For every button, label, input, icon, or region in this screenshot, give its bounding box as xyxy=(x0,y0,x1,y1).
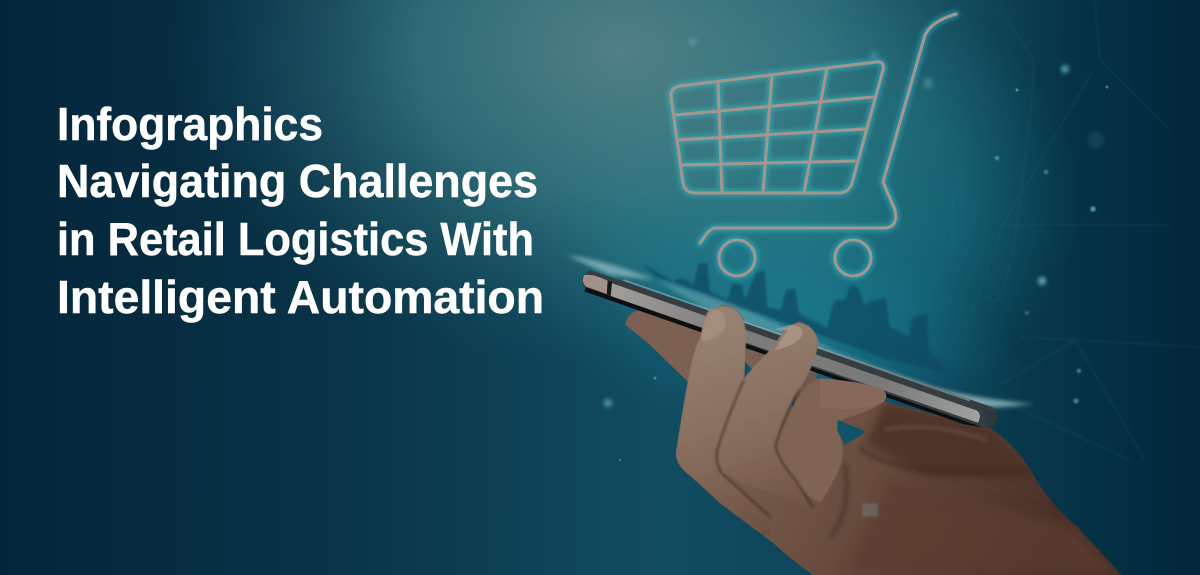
palm top shadow xyxy=(866,402,1034,477)
finger gaps xyxy=(744,362,866,445)
city skyline xyxy=(641,263,949,373)
fingernails xyxy=(702,309,803,350)
title: Navigating Challenges xyxy=(57,155,538,207)
title xyxy=(57,98,544,323)
icon: neon shopping cart xyxy=(671,14,956,276)
back finger xyxy=(628,310,688,383)
network lines xyxy=(952,0,1200,460)
title: Intelligent Automation xyxy=(57,271,544,323)
creases xyxy=(830,424,988,537)
finger C tip over phone underside xyxy=(820,378,886,409)
title: in Retail Logistics With xyxy=(57,213,534,265)
glowing particles xyxy=(604,38,1108,515)
translucent particle on hand xyxy=(862,503,878,517)
hand silhouette xyxy=(626,305,1122,575)
title: Infographics xyxy=(57,98,323,150)
palm lower tone xyxy=(864,492,1113,575)
screen glow xyxy=(566,255,1034,408)
finger B xyxy=(716,323,818,510)
phone body xyxy=(582,270,997,428)
finger A xyxy=(676,306,770,540)
phone scene, drawn in a scaled coordinate system xyxy=(566,255,1141,575)
finger C xyxy=(775,378,886,503)
finger crease lines xyxy=(717,382,813,517)
